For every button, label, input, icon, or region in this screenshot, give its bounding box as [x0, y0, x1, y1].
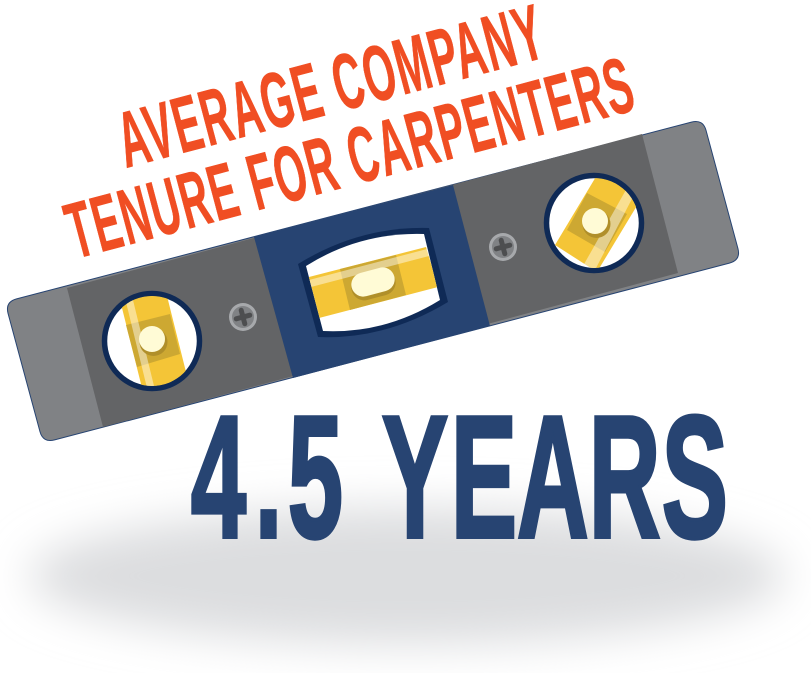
grey body section [67, 134, 678, 427]
level body with end caps [7, 121, 739, 441]
left round vial [104, 288, 200, 392]
spirit level tool [7, 121, 739, 441]
right screw [489, 233, 517, 261]
stat: 4.5 years: 4.5 YEARS [191, 381, 728, 575]
left screw [229, 303, 257, 331]
centre vial [298, 228, 448, 337]
ground shadow [29, 508, 785, 644]
right round vial [546, 170, 650, 272]
navy centre section [254, 185, 490, 378]
